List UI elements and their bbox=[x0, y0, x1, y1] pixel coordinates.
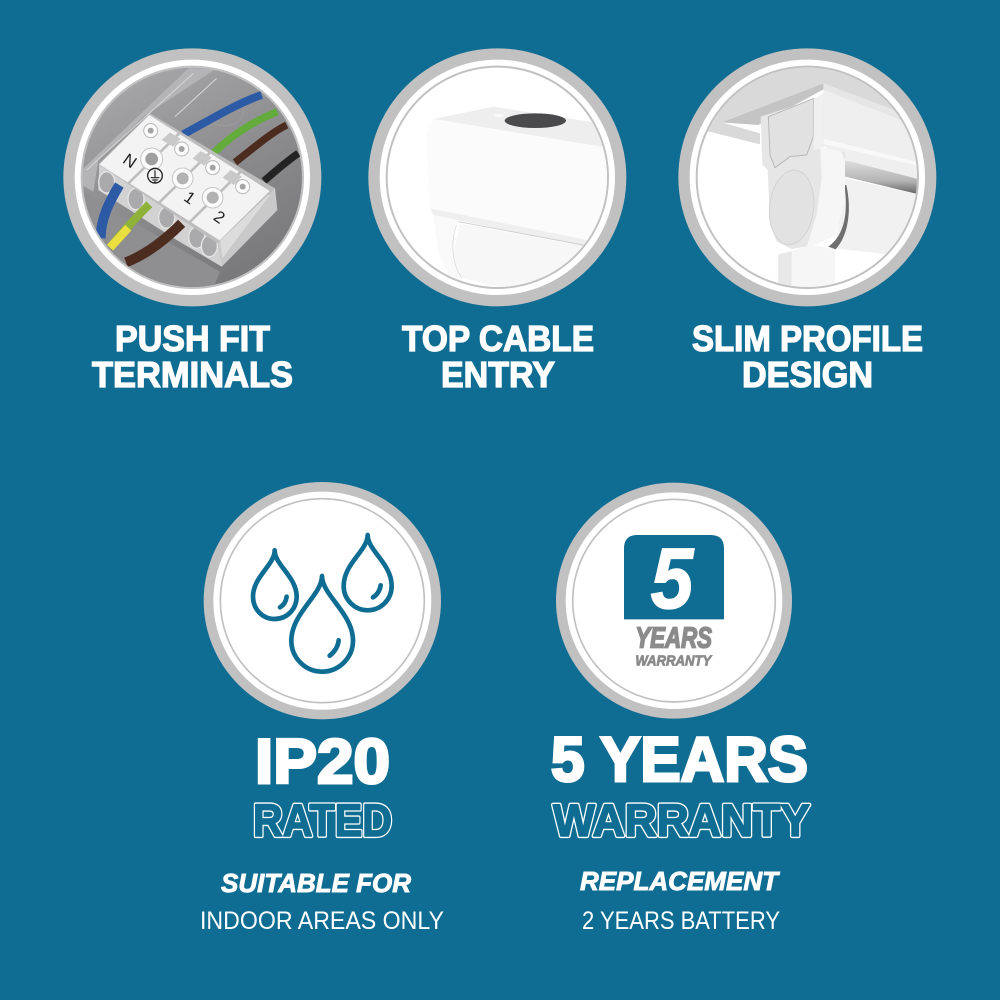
heading: top cable entry bbox=[402, 318, 594, 395]
icon: luminaire end cap photo circle bbox=[368, 48, 626, 312]
icon: three water drops in circle bbox=[204, 482, 441, 719]
terminal labels: 1 bbox=[180, 187, 199, 208]
outlined label: rated: RATED bbox=[253, 795, 392, 846]
heading: 5 years: 5 YEARS bbox=[551, 725, 808, 795]
heading: slim profile design bbox=[692, 318, 923, 395]
text: replacement: REPLACEMENT bbox=[580, 866, 780, 896]
icon: 5 years warranty badge in circle: YEARS bbox=[635, 622, 712, 654]
terminal block front face bbox=[98, 164, 277, 267]
icon: terminal block photo circle bbox=[60, 45, 325, 312]
icon: 5 years warranty badge in circle: 5 bbox=[651, 531, 694, 627]
text: 2 years battery: 2 YEARS BATTERY bbox=[582, 907, 780, 935]
terminal labels: N bbox=[119, 150, 140, 172]
text: suitable for: SUITABLE FOR bbox=[221, 868, 411, 898]
heading: IP20: IP20 bbox=[255, 727, 390, 797]
text: indoor areas only: INDOOR AREAS ONLY bbox=[200, 907, 444, 935]
upper wires bbox=[183, 95, 298, 181]
outlined label: warranty: WARRANTY bbox=[553, 795, 810, 846]
panel: top cable entry bbox=[368, 48, 626, 395]
panel: slim profile design bbox=[678, 48, 936, 395]
earth symbol bbox=[148, 168, 162, 183]
outlined label: rated: RATED bbox=[253, 795, 392, 846]
heading: push fit terminals: PUSH FIT bbox=[115, 318, 270, 359]
heading: push fit terminals: TERMINALS bbox=[92, 354, 293, 395]
bracket body bbox=[761, 93, 845, 249]
icon: 5 years warranty badge in circle bbox=[556, 483, 792, 719]
heading: slim profile design: DESIGN bbox=[742, 354, 873, 395]
terminal labels: 2 bbox=[210, 207, 229, 228]
heading: slim profile design: SLIM PROFILE bbox=[692, 318, 923, 359]
panel: push fit terminals bbox=[60, 45, 325, 395]
icon: 5 years warranty badge in circle: WARRANTY bbox=[635, 653, 713, 670]
heading: top cable entry: ENTRY bbox=[441, 354, 555, 395]
lower wires bbox=[101, 185, 182, 262]
heading: top cable entry: TOP CABLE bbox=[402, 318, 594, 359]
panel: 5 years warranty bbox=[551, 483, 810, 935]
outlined label: warranty: WARRANTY bbox=[553, 795, 810, 846]
terminal block top face bbox=[98, 113, 275, 243]
heading: push fit terminals bbox=[92, 318, 293, 395]
icon: slim profile bracket photo circle bbox=[678, 48, 936, 306]
panel: IP20 rating bbox=[200, 482, 444, 935]
terminal labels bbox=[122, 153, 225, 224]
cable entry grommet bbox=[505, 113, 566, 128]
